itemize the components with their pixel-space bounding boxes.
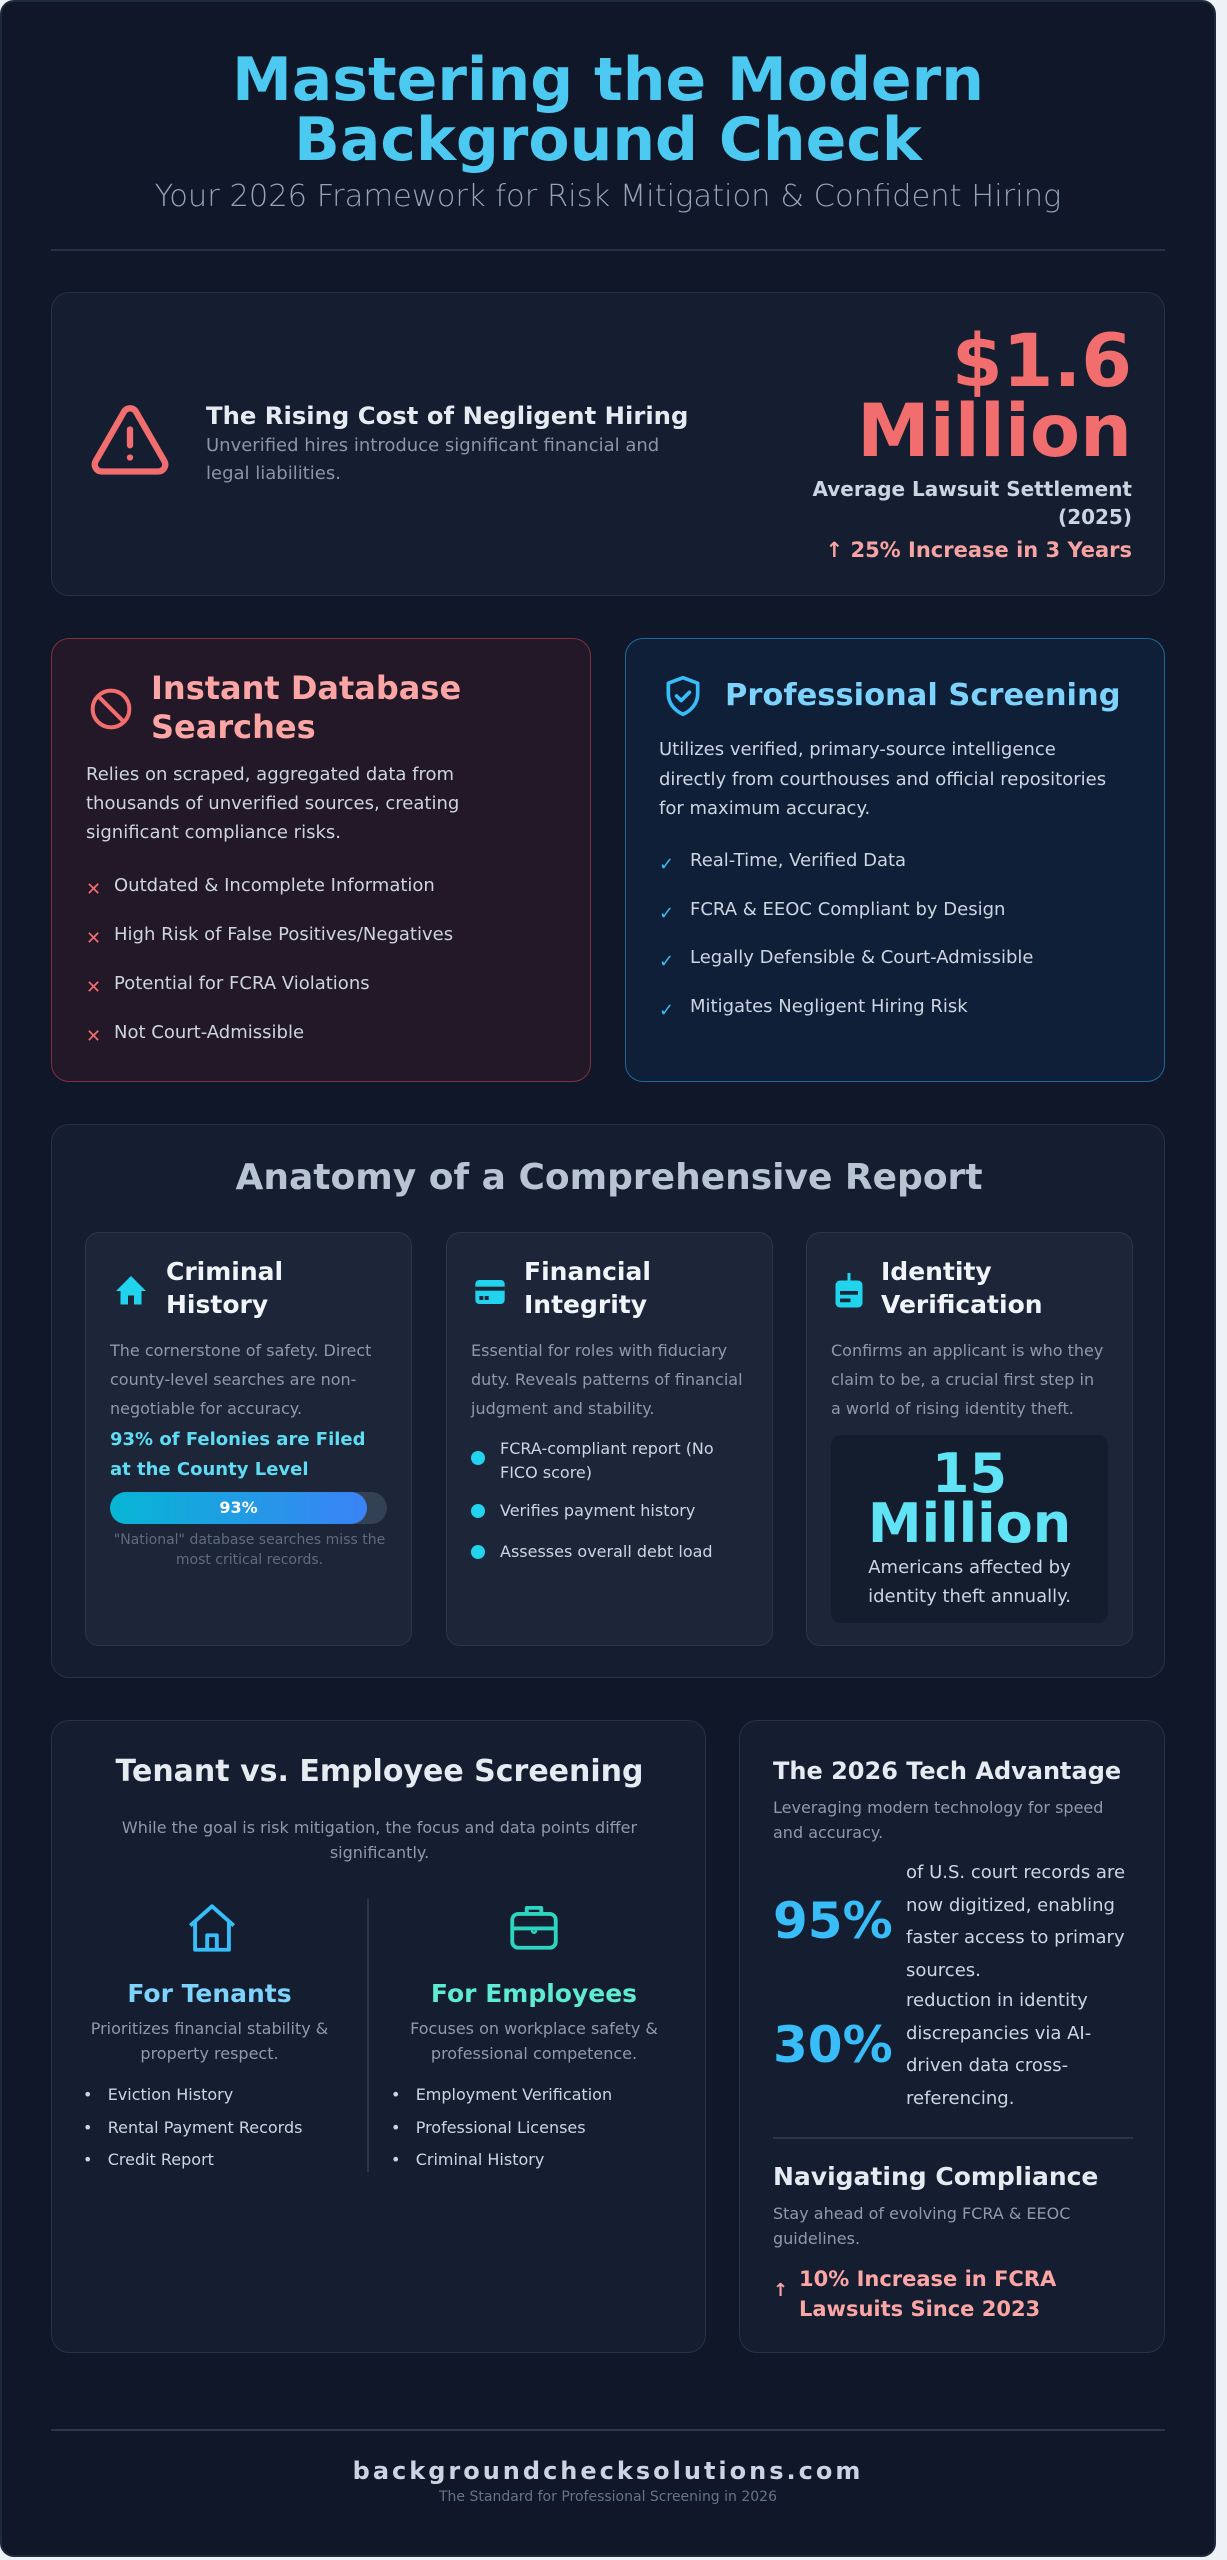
heading: Professional Screening: [725, 678, 1121, 713]
icon: shield: [666, 676, 700, 716]
body: Utilizes verified, primary-source intelligence: [659, 739, 1056, 760]
title: Integrity: [524, 1290, 647, 1319]
stat: $1.6 Million: Million: [857, 389, 1132, 474]
list: risks: ✕: [86, 1026, 101, 1047]
description: The cornerstone of safety. Direct: [110, 1341, 371, 1360]
subtitle: [122, 1818, 638, 1862]
panel: anatomy of a report: [51, 1124, 1165, 1678]
card: criminal history: [85, 1232, 412, 1646]
icon: warning: [92, 405, 168, 475]
description: [206, 435, 659, 484]
description: [470, 1341, 743, 1418]
description: negotiable for accuracy.: [110, 1399, 302, 1418]
column: employees: Focuses on workplace safety &: [410, 2019, 658, 2038]
heading: Anatomy of a Comprehensive Report: [235, 1157, 983, 1198]
column: tenants: For Tenants: [127, 1979, 292, 2008]
list: benefits: ✓: [659, 854, 674, 875]
subtitle: Your 2026 Framework for Risk Mitigation & Confident Hiring: [155, 179, 1061, 214]
list: financial items: Verifies payment history: [500, 1501, 695, 1520]
list: benefits: Legally Defensible & Court-Admissible: [690, 947, 1034, 968]
progress bar: 93%: [219, 1498, 258, 1517]
stat: 95%: faster access to primary: [906, 1927, 1125, 1948]
list: benefits: ✓: [659, 951, 674, 972]
body: for maximum accuracy.: [659, 798, 870, 819]
stat: 95%: of U.S. court records are: [906, 1862, 1125, 1883]
body: thousands of unverified sources, creating: [86, 793, 459, 814]
body: Relies on scraped, aggregated data from: [86, 764, 454, 785]
footer: [353, 2457, 863, 2505]
callout: FCRA lawsuits: ↑: [773, 2280, 788, 2301]
list: risks: ✕: [86, 928, 101, 949]
stat text: [110, 1429, 366, 1480]
panel: rising cost: [51, 292, 1165, 596]
title: Verification: [881, 1290, 1043, 1319]
list: benefits: [659, 850, 1034, 1020]
stat: 30%: reduction in identity: [906, 1990, 1088, 2011]
icon: id badge: [836, 1273, 862, 1308]
list: risks: ✕: [86, 879, 101, 900]
callout: FCRA lawsuits: [773, 2267, 1056, 2321]
list: risks: [86, 875, 453, 1047]
stat: $1.6 Million: [812, 319, 1132, 562]
stat: 95%: 95%: [773, 1892, 893, 1950]
subtitle: While the goal is risk mitigation, the focus and data points differ: [122, 1818, 637, 1837]
callout: FCRA lawsuits: 10% Increase in FCRA: [799, 2267, 1056, 2291]
stat: $1.6 Million: ↑ 25% Increase in 3 Years: [826, 538, 1132, 562]
title: [881, 1257, 1043, 1319]
callout: FCRA lawsuits: Lawsuits Since 2023: [799, 2297, 1040, 2321]
description: a world of rising identity theft.: [831, 1399, 1074, 1418]
list: financial items: [471, 1439, 714, 1561]
heading: [151, 669, 461, 746]
description: [831, 1341, 1103, 1418]
body: directly from courthouses and official repositories: [659, 768, 1106, 790]
stat: 30%: [773, 1990, 1091, 2108]
column: tenants: • Rental Payment Records: [83, 2118, 302, 2136]
icon: briefcase: [510, 1906, 558, 1950]
title: Criminal: [166, 1257, 283, 1286]
title: [166, 1257, 283, 1319]
stat: $1.6 Million: (2025): [1058, 505, 1132, 529]
panel: instant database searches: [51, 638, 591, 1082]
icon: house: [189, 1904, 235, 1952]
stat: 30%: 30%: [773, 2016, 893, 2074]
heading: The 2026 Tech Advantage: [773, 1757, 1121, 1785]
list: benefits: ✓: [659, 1000, 674, 1020]
stat box: identity theft annually.: [868, 1586, 1071, 1607]
stat box: Million: [868, 1492, 1071, 1555]
list: benefits: FCRA & EEOC Compliant by Design: [690, 898, 1005, 920]
title: Financial: [524, 1257, 651, 1286]
column: tenants: • Credit Report: [83, 2150, 214, 2169]
list: risks: ✕: [86, 977, 101, 998]
stat: 95%: now digitized, enabling: [906, 1894, 1115, 1916]
column: employees: • Employment Verification: [391, 2085, 612, 2104]
list: risks: Potential for FCRA Violations: [114, 973, 370, 994]
stat text: 93% of Felonies are Filed: [110, 1429, 366, 1450]
stat box: Americans affected by: [868, 1557, 1071, 1578]
caption: most critical records.: [176, 1552, 323, 1568]
description: Unverified hires introduce significant financial and: [206, 435, 659, 456]
description: judgment and stability.: [471, 1399, 654, 1418]
list: financial items: FICO score): [500, 1463, 592, 1482]
caption: "National" database searches miss the: [114, 1532, 385, 1548]
heading: compliance: Navigating Compliance: [773, 2162, 1098, 2191]
body: [86, 764, 459, 843]
icon: card: [475, 1280, 505, 1304]
stat: 30%: referencing.: [906, 2088, 1014, 2108]
card: financial integrity: [446, 1232, 773, 1646]
subtitle: significantly.: [330, 1843, 429, 1862]
title: [524, 1257, 651, 1319]
description: Essential for roles with fiduciary: [471, 1341, 727, 1360]
panel: tech advantage & compliance: Stay ahead of evolving FCRA & EEOC: [773, 2204, 1070, 2223]
icon: ban: [90, 688, 132, 730]
heading: Searches: [151, 708, 316, 746]
panel: tech advantage & compliance: and accuracy.: [773, 1823, 883, 1842]
column: employees: professional competence.: [431, 2044, 637, 2063]
list: risks: High Risk of False Positives/Negatives: [114, 924, 453, 945]
description: legal liabilities.: [206, 463, 341, 484]
list: benefits: ✓: [659, 902, 674, 924]
card: identity verification: [806, 1232, 1133, 1646]
column: tenants: Prioritizes financial stability &: [91, 2019, 328, 2038]
heading: The Rising Cost of Negligent Hiring: [206, 401, 688, 430]
stat box: [831, 1435, 1108, 1623]
list: risks: Not Court-Admissible: [114, 1022, 304, 1043]
title: Mastering the Modern: [232, 45, 984, 115]
icon: home: [116, 1276, 146, 1304]
caption: [114, 1532, 385, 1568]
stat: 95%: [773, 1862, 1125, 1980]
heading: Instant Database: [151, 669, 461, 707]
column: tenants: property respect.: [140, 2044, 279, 2063]
title: Background Check: [294, 105, 922, 175]
stat box: 15: [932, 1442, 1007, 1505]
column: employees: • Criminal History: [391, 2150, 544, 2169]
description: claim to be, a crucial first step in: [831, 1370, 1094, 1389]
list: benefits: Mitigates Negligent Hiring Risk: [690, 996, 968, 1016]
list: benefits: Real-Time, Verified Data: [690, 850, 906, 871]
column: employees: For Employees: [431, 1979, 637, 2008]
panel: professional screening: [625, 638, 1165, 1082]
description: [110, 1341, 371, 1418]
panel: tech advantage & compliance: guidelines.: [773, 2229, 860, 2248]
heading: Tenant vs. Employee Screening: [116, 1754, 644, 1789]
panel: tech advantage & compliance: Leveraging modern technology for speed: [773, 1798, 1103, 1817]
stat: 30%: discrepancies via AI-: [906, 2022, 1091, 2044]
description: county-level searches are non-: [110, 1370, 356, 1389]
body: [659, 739, 1106, 819]
panel: tech advantage & compliance: [739, 1720, 1165, 2353]
stat: $1.6 Million: Average Lawsuit Settlement: [812, 477, 1132, 501]
stat: $1.6 Million: $1.6: [952, 319, 1132, 404]
panel: tenant vs employee: [51, 1720, 706, 2353]
column: tenants: [83, 1904, 328, 2169]
footer: The Standard for Professional Screening in 2026: [439, 2489, 777, 2505]
description: Confirms an applicant is who they: [831, 1341, 1103, 1360]
list: financial items: Assesses overall debt load: [500, 1542, 713, 1561]
stat: 30%: driven data cross-: [906, 2055, 1068, 2076]
description: duty. Reveals patterns of financial: [471, 1370, 743, 1389]
column: employees: • Professional Licenses: [391, 2118, 586, 2136]
list: risks: Outdated & Incomplete Information: [114, 875, 435, 896]
title: Identity: [881, 1257, 992, 1286]
title: [232, 45, 984, 175]
list: financial items: FCRA-compliant report (No: [500, 1439, 714, 1458]
column: tenants: • Eviction History: [83, 2085, 233, 2104]
footer: backgroundchecksolutions.com: [353, 2457, 863, 2485]
stat: 95%: sources.: [906, 1960, 981, 1980]
stat text: at the County Level: [110, 1459, 309, 1480]
body: significant compliance risks.: [86, 822, 341, 843]
progress bar: [110, 1492, 387, 1524]
column: employees: [391, 1906, 658, 2169]
title: History: [166, 1290, 268, 1319]
